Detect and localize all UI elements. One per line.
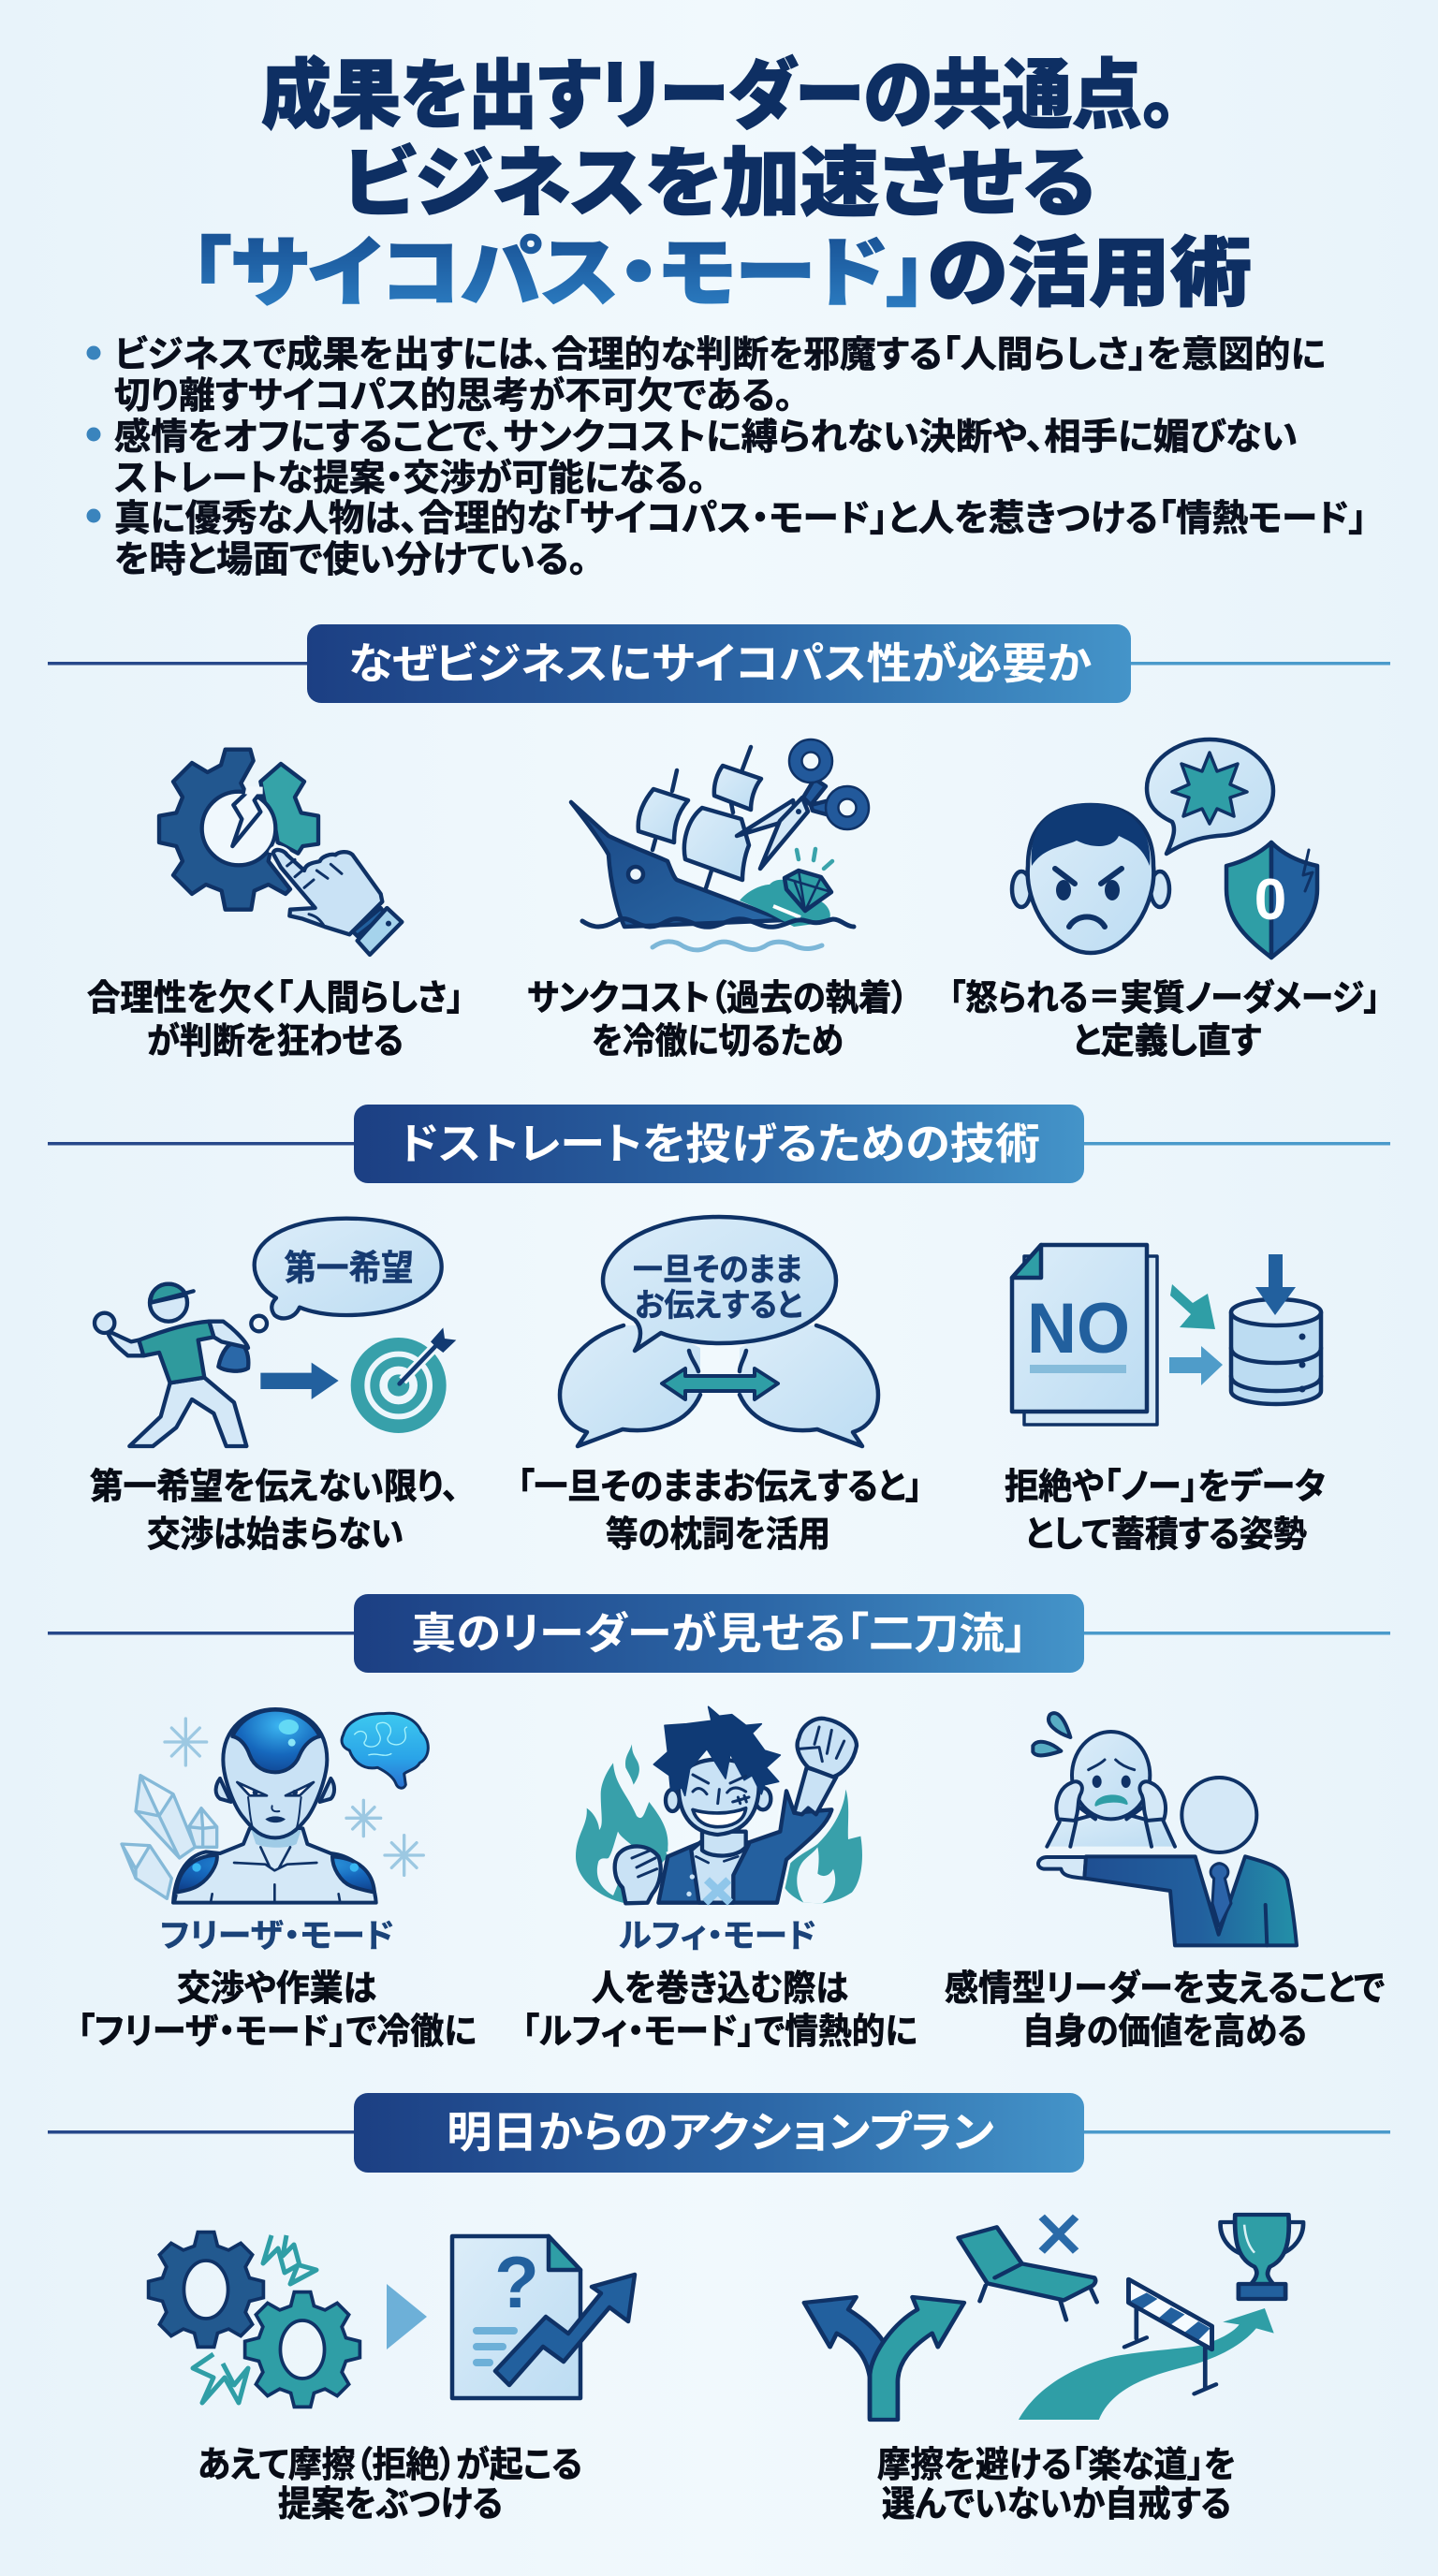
label: frieza mode: フリーザ・モード bbox=[160, 1918, 394, 1954]
caption: 交渉や作業は bbox=[177, 1969, 376, 2009]
icon: speech bubbles and double arrow: 一旦そのまま bbox=[633, 1252, 802, 1288]
caption: を冷徹に切るため bbox=[592, 1022, 844, 1061]
title: ビジネスを加速させる bbox=[343, 142, 1095, 227]
icon: angry face, burst bubble and shield: 0 bbox=[1255, 868, 1286, 932]
caption bbox=[945, 1969, 1385, 2052]
icon: NO document and database bbox=[1012, 1245, 1321, 1425]
section heading bbox=[48, 1594, 1390, 1673]
section heading: なぜビジネスにサイコパス性が必要か bbox=[348, 639, 1092, 688]
icon: luffy mode character bbox=[576, 1706, 862, 1903]
icon: sinking ship and scissors bbox=[571, 739, 869, 950]
caption: 提案をぶつける bbox=[278, 2485, 503, 2525]
icon: speech bubbles and double arrow: お伝えすると bbox=[635, 1288, 802, 1324]
icon: worried person and pointing leader bbox=[1033, 1713, 1297, 1945]
caption bbox=[527, 979, 908, 1061]
panel: why business needs psychopathy bbox=[48, 624, 1390, 1061]
summary bullet list: を時と場面で使い分けている。 bbox=[114, 540, 587, 580]
caption: 「怒られる＝実質ノーダメージ」 bbox=[949, 979, 1380, 1018]
caption: サンクコスト（過去の執着） bbox=[527, 979, 908, 1018]
icon: frieza mode character bbox=[122, 1709, 428, 1903]
caption bbox=[522, 1969, 917, 2052]
caption: 感情型リーダーを支えることで bbox=[945, 1969, 1385, 2009]
caption: が判断を狂わせる bbox=[147, 1022, 404, 1061]
panel: the true leader's two styles bbox=[48, 1594, 1390, 2052]
caption: 合理性を欠く「人間らしさ」 bbox=[87, 979, 463, 1018]
caption: 等の枕詞を活用 bbox=[606, 1515, 830, 1555]
caption bbox=[518, 1468, 922, 1555]
section heading: 明日からのアクションプラン bbox=[447, 2108, 994, 2157]
icon: broken gear and hand bbox=[159, 750, 402, 955]
caption: 自身の価値を高める bbox=[1022, 2012, 1307, 2052]
section heading bbox=[48, 1105, 1390, 1183]
caption: あえて摩擦（拒絶）が起こる bbox=[198, 2446, 582, 2485]
title: 成果を出すリーダーの共通点。 bbox=[261, 54, 1177, 139]
caption bbox=[949, 979, 1380, 1061]
icon: angry face, burst bubble and shield bbox=[1012, 739, 1317, 958]
icon: colliding gears and rising document bbox=[149, 2232, 635, 2407]
summary bullet list: 真に優秀な人物は、合理的な「サイコパス・モード」と人を惹きつける「情熱モード」 bbox=[114, 499, 1367, 539]
caption: 選んでいないか自戒する bbox=[882, 2485, 1231, 2525]
icon: NO document and database: NO bbox=[1027, 1289, 1130, 1368]
caption: 第一希望を伝えない限り、 bbox=[90, 1468, 459, 1507]
caption bbox=[877, 2446, 1236, 2525]
section heading: 真のリーダーが見せる「二刀流」 bbox=[411, 1609, 1027, 1658]
caption: 拒絶や「ノー」をデータ bbox=[1005, 1467, 1326, 1507]
section heading bbox=[48, 624, 1390, 703]
summary bullet list: 感情をオフにすることで、サンクコストに縛られない決断や、相手に媚びない bbox=[114, 417, 1298, 458]
summary bullet list: ビジネスで成果を出すには、合理的な判断を邪魔する「人間らしさ」を意図的に bbox=[114, 335, 1326, 375]
title: 「サイコパス・モード」 の活用術 bbox=[190, 232, 1252, 316]
icon: speech bubbles and double arrow bbox=[560, 1217, 878, 1446]
caption: 交渉は始まらない bbox=[147, 1515, 404, 1555]
caption bbox=[78, 1969, 477, 2052]
label: luffy mode: ルフィ・モード bbox=[619, 1918, 816, 1954]
icon: pitcher, target and bubble: 第一希望 bbox=[284, 1248, 414, 1287]
caption bbox=[198, 2446, 582, 2525]
section heading: ドストレートを投げるための技術 bbox=[399, 1120, 1040, 1168]
caption bbox=[90, 1468, 459, 1555]
icon: pitcher, target and bubble bbox=[95, 1219, 456, 1446]
caption bbox=[87, 979, 463, 1061]
caption: として蓄積する姿勢 bbox=[1025, 1515, 1307, 1555]
title bbox=[190, 54, 1252, 316]
section heading bbox=[48, 2093, 1390, 2173]
caption: 「一旦そのままお伝えすると」 bbox=[518, 1468, 922, 1507]
panel: techniques for throwing a straight bbox=[48, 1105, 1390, 1555]
caption: 「ルフィ・モード」で情熱的に bbox=[522, 2012, 917, 2052]
summary bullet list: 切り離すサイコパス的思考が不可欠である。 bbox=[114, 376, 793, 417]
icon: winding road, hurdle and trophy bbox=[1019, 2215, 1303, 2420]
summary bullet list: ストレートな提案・交渉が可能になる。 bbox=[114, 459, 706, 499]
icon: lounge chair crossed out bbox=[959, 2217, 1097, 2320]
panel: action plan from tomorrow bbox=[48, 2093, 1390, 2525]
caption: と定義し直す bbox=[1073, 1022, 1261, 1061]
icon: colliding gears and rising document: ? bbox=[494, 2241, 539, 2323]
caption: 人を巻き込む際は bbox=[592, 1969, 848, 2009]
caption: 摩擦を避ける「楽な道」を bbox=[877, 2446, 1236, 2485]
caption bbox=[1005, 1467, 1326, 1555]
summary bullet list bbox=[86, 335, 1367, 580]
icon: forked path bbox=[804, 2297, 964, 2420]
caption: 「フリーザ・モード」で冷徹に bbox=[78, 2012, 477, 2052]
